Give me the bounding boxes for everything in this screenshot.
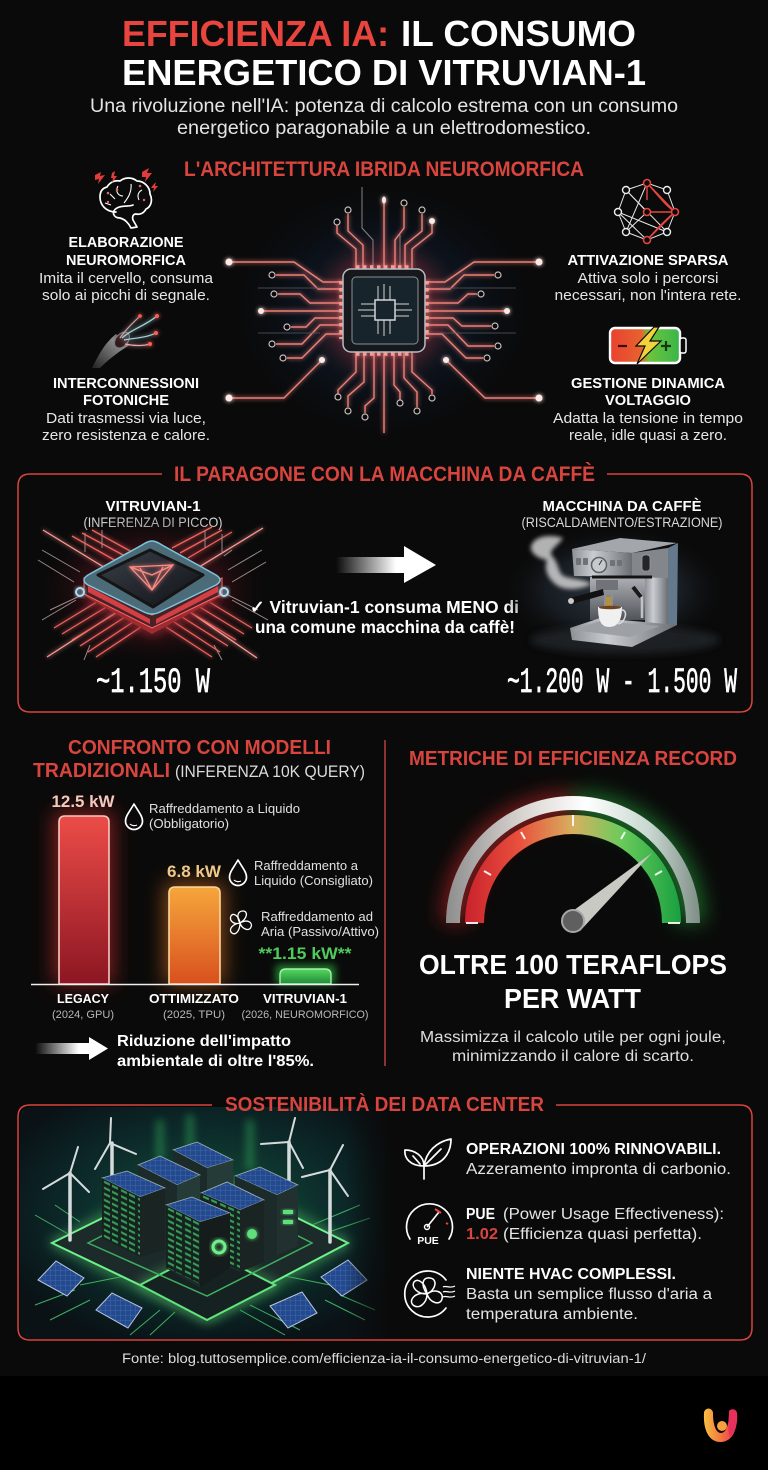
chip inner icon [358, 284, 412, 336]
axis label: ottimizzato: (2025, TPU) [163, 1009, 225, 1021]
title: ENERGETICO DI VITRUVIAN-1 [122, 52, 646, 93]
block: attivazione sparsa: ATTIVAZIONE SPARSA [568, 253, 729, 269]
label: vitruvian-1: (INFERENZA DI PICCO) [84, 514, 222, 530]
heading: confronto: CONFRONTO CON MODELLI [68, 737, 331, 759]
bar: vitruvian-1 1.15 kW [258, 944, 352, 984]
chip pads [341, 267, 427, 354]
block: attivazione sparsa: Attiva solo i percorsi [578, 271, 718, 287]
icon: pue gauge [406, 1204, 452, 1247]
item: rinnovabili: Azzeramento impronta di carbonio. [466, 1161, 731, 1178]
block: elaborazione neuromorfica: Imita il cervello, consuma [39, 271, 214, 287]
block: attivazione sparsa: necessari, non l'intera rete. [554, 288, 742, 304]
solar panels [38, 1260, 367, 1328]
cooling note: aria [230, 910, 379, 939]
arrow and impact statement: ambientale di oltre l'85%. [117, 1053, 314, 1070]
title: EFFICIENZA IA: [122, 13, 389, 54]
panel: paragone macchina da caffè [18, 463, 752, 712]
server racks [102, 1142, 298, 1288]
arrow and impact statement [35, 1033, 314, 1070]
gauge [446, 796, 700, 932]
block: elaborazione neuromorfica: ELABORAZIONE [68, 235, 184, 251]
bar: legacy 12.5 kW [52, 792, 115, 984]
axis label: ottimizzato: OTTIMIZZATO [149, 991, 239, 1006]
block: gestione dinamica voltaggio: GESTIONE DINAMICA [571, 376, 726, 392]
cooling note: aria: Aria (Passivo/Attivo) [261, 925, 379, 939]
circuit traces [229, 200, 539, 433]
block: elaborazione neuromorfica [39, 168, 214, 304]
cooling note: aria: Raffreddamento ad [261, 910, 373, 924]
item: rinnovabili: OPERAZIONI 100% RINNOVABILI. [466, 1141, 721, 1158]
metric value: OLTRE 100 TERAFLOPS [419, 949, 727, 980]
block: elaborazione neuromorfica: NEUROMORFICA [66, 253, 187, 269]
item: hvac: Basta un semplice flusso d'aria a [466, 1286, 712, 1303]
cooling note: consigliato: Liquido (Consigliato) [254, 874, 373, 888]
item: hvac: NIENTE HVAC COMPLESSI. [466, 1266, 676, 1283]
block: interconnessioni fotoniche: zero resistenza e calore. [42, 428, 210, 444]
bar: vitruvian-1 1.15 kW: **1.15 kW** [258, 944, 352, 963]
title [122, 13, 646, 93]
arrow and impact statement: Riduzione dell'impatto [117, 1033, 291, 1050]
metric description: Massimizza il calcolo utile per ogni joule, [420, 1029, 726, 1046]
heading: sostenibilità: SOSTENIBILITÀ DEI DATA CENTER [225, 1093, 545, 1116]
heading: architettura: L'ARCHITETTURA IBRIDA NEUROMORFICA [184, 158, 584, 181]
item: pue [406, 1204, 724, 1247]
item: pue: PUE [466, 1206, 495, 1223]
callout: meno di una macchina da caffè [250, 597, 519, 637]
trace end nodes [269, 200, 501, 420]
bar: ottimizzato 6.8 kW [165, 862, 224, 984]
metric value: PER WATT [504, 983, 641, 1014]
block: interconnessioni fotoniche: Dati trasmessi via luce, [46, 411, 206, 427]
subtitle [90, 96, 678, 139]
chip body [343, 269, 425, 352]
cooling note: consigliato: Raffreddamento a [254, 859, 358, 873]
heading: confronto: (INFERENZA 10K QUERY) [175, 762, 365, 781]
item: pue: 1.02 [466, 1226, 498, 1243]
label: macchina da caffè: MACCHINA DA CAFFÈ [542, 498, 702, 515]
item: hvac: temperatura ambiente. [466, 1306, 638, 1323]
axis label: ottimizzato [149, 991, 239, 1021]
callout: meno di una macchina da caffè: ✓ Vitruvian-1 consuma MENO di [250, 597, 519, 617]
subtitle: Una rivoluzione nell'IA: potenza di calcolo estrema con un consumo [90, 96, 678, 117]
block: interconnessioni fotoniche [42, 314, 210, 444]
item: pue: (Efficienza quasi perfetta). [503, 1226, 702, 1243]
icon: brain [95, 168, 158, 228]
logo [704, 1408, 737, 1442]
item: hvac [405, 1266, 712, 1323]
illustration: green data center [20, 1107, 392, 1339]
block: gestione dinamica voltaggio: VOLTAGGIO [605, 393, 691, 409]
heading: confronto [33, 737, 365, 782]
icon: fan with airflow [405, 1271, 455, 1317]
platform [52, 1170, 348, 1317]
item: rinnovabili [405, 1139, 731, 1179]
icon: sparse network [614, 180, 678, 244]
bar: ottimizzato 6.8 kW: 6.8 kW [167, 862, 222, 881]
axis label: vitruvian-1 [242, 991, 368, 1021]
heading: paragone: IL PARAGONE CON LA MACCHINA DA CAFFÈ [174, 463, 595, 486]
metric value [419, 949, 727, 1014]
bar: legacy 12.5 kW: 12.5 kW [52, 792, 115, 811]
axis label: vitruvian-1: (2026, NEUROMORFICO) [242, 1009, 368, 1021]
metric description: minimizzando il calore di scarto. [452, 1048, 694, 1065]
panel: confronto modelli [31, 737, 379, 1070]
title: IL CONSUMO [401, 13, 636, 54]
machine back and column [590, 577, 650, 620]
arrow [336, 546, 436, 583]
axis label: legacy: (2024, GPU) [52, 1009, 114, 1021]
icon: optical fibre cable [92, 314, 159, 368]
axis label: legacy: LEGACY [57, 991, 109, 1006]
steam [531, 536, 592, 589]
block: gestione dinamica voltaggio [553, 327, 743, 444]
circuit lines [35, 1205, 375, 1335]
block: interconnessioni fotoniche: INTERCONNESSIONI [53, 376, 199, 392]
cooling note: obbligatorio [126, 802, 300, 831]
axis label: legacy [52, 991, 114, 1021]
subtitle: energetico paragonabile a un elettrodomestico. [177, 118, 591, 139]
panel: sostenibilità data center [18, 1093, 752, 1340]
group head and handle [596, 580, 618, 590]
base and cup [570, 618, 677, 647]
icon: leaves [405, 1139, 451, 1179]
block: interconnessioni fotoniche: FOTONICHE [83, 393, 169, 409]
label: macchina da caffè [522, 498, 722, 530]
block: gestione dinamica voltaggio: Adatta la tensione in tempo [553, 411, 743, 427]
panel: metriche di efficienza [409, 748, 737, 1065]
axis label: vitruvian-1: VITRUVIAN-1 [263, 991, 347, 1006]
wind turbines [43, 1118, 348, 1242]
illustration: isometric glowing chip [33, 512, 273, 668]
item: pue: (Power Usage Effectiveness): [503, 1206, 724, 1223]
heading: confronto: TRADIZIONALI [33, 760, 170, 782]
cooling note: consigliato [230, 859, 373, 888]
bar chart [31, 792, 368, 1021]
block: attivazione sparsa [554, 180, 742, 304]
metric description [420, 1029, 726, 1065]
central chip diagram [224, 175, 544, 445]
label: vitruvian-1 [84, 498, 222, 530]
cooling note: obbligatorio: (Obbligatorio) [149, 817, 229, 831]
power reading: vitruvian: ~1.150 W [96, 663, 210, 703]
illustration: coffee machine [500, 525, 730, 655]
label: macchina da caffè: (RISCALDAMENTO/ESTRAZIONE) [522, 514, 722, 530]
callout: meno di una macchina da caffè: una comune macchina da caffè! [255, 617, 515, 637]
block: gestione dinamica voltaggio: reale, idle quasi a zero. [569, 428, 727, 444]
source footer: Fonte: blog.tuttosemplice.com/efficienza-ia-il-consumo-energetico-di-vitruvian-1/ [122, 1351, 646, 1366]
label: vitruvian-1: VITRUVIAN-1 [106, 498, 200, 515]
icon: battery [610, 327, 686, 364]
heading: metriche: METRICHE DI EFFICIENZA RECORD [409, 748, 737, 770]
icon: pue gauge: PUE [417, 1235, 439, 1247]
cooling note: obbligatorio: Raffreddamento a Liquido [149, 802, 300, 816]
needle [566, 853, 652, 931]
block: elaborazione neuromorfica: solo ai picchi di segnale. [42, 288, 210, 304]
